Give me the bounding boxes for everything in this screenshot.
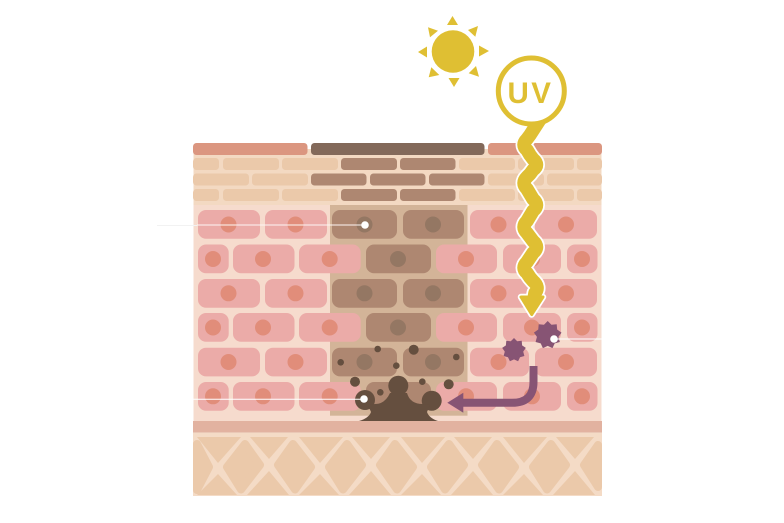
arrow: UV ray squiggle	[521, 118, 543, 314]
panel: dermis lattice	[193, 433, 602, 496]
melanin granules	[337, 345, 460, 396]
basement membrane band	[193, 421, 602, 433]
panel: lower epidermis background	[194, 205, 602, 421]
icon: melanin splash	[355, 376, 442, 421]
callout line: right	[550, 335, 602, 343]
icon: UV badge	[498, 58, 564, 124]
callout line: upper left	[157, 221, 369, 229]
pink skin cells	[198, 210, 598, 411]
panel: stratum corneum and upper epidermis	[193, 143, 602, 205]
callout line: lower left	[193, 395, 368, 403]
arrow: purple signal arrow	[447, 366, 534, 413]
UV label: UV	[508, 77, 553, 110]
icon: small melanocyte	[502, 338, 526, 361]
pigmented brown cells	[332, 210, 464, 411]
panel: pigmented column background	[330, 205, 468, 416]
icon: large melanocyte	[534, 321, 561, 348]
icon: sun	[418, 16, 489, 87]
